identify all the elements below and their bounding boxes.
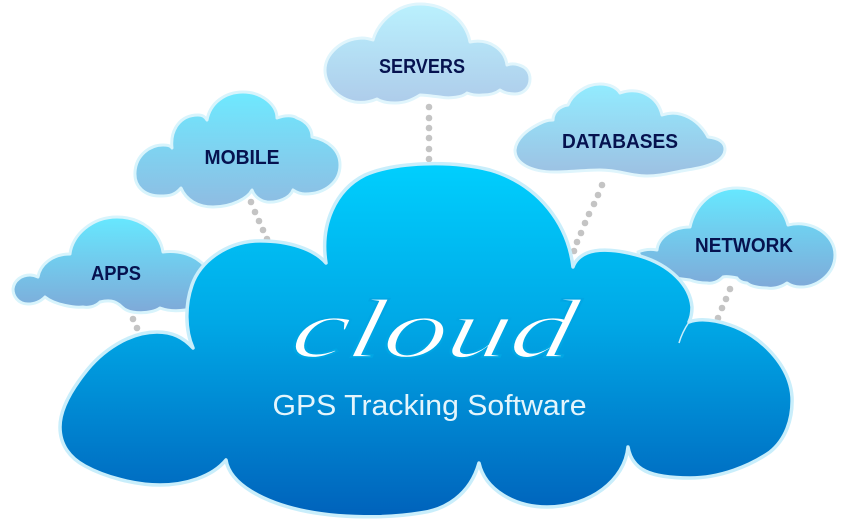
cloud: mobile [135,92,340,207]
dotted connector: databases [571,182,605,254]
notch: upper-right fold [679,322,689,343]
label: apps: APPS [91,263,141,285]
dotted connector: network [715,286,733,321]
dotted connector: mobile [248,199,270,242]
cloud: servers [325,4,530,103]
cloud: apps [13,217,205,313]
main cloud [60,164,792,517]
label: network: NETWORK [695,235,794,257]
subtitle: GPS Tracking Software [272,390,586,422]
cloud: network [638,188,835,288]
script title: cloud: cloud [284,283,587,376]
dotted connector: apps [130,316,140,331]
label: mobile: MOBILE [204,147,280,169]
dotted connector: servers [426,104,432,162]
cloud: databases [515,84,725,176]
label: databases: DATABASES [562,131,678,153]
label: servers: SERVERS [379,56,465,78]
